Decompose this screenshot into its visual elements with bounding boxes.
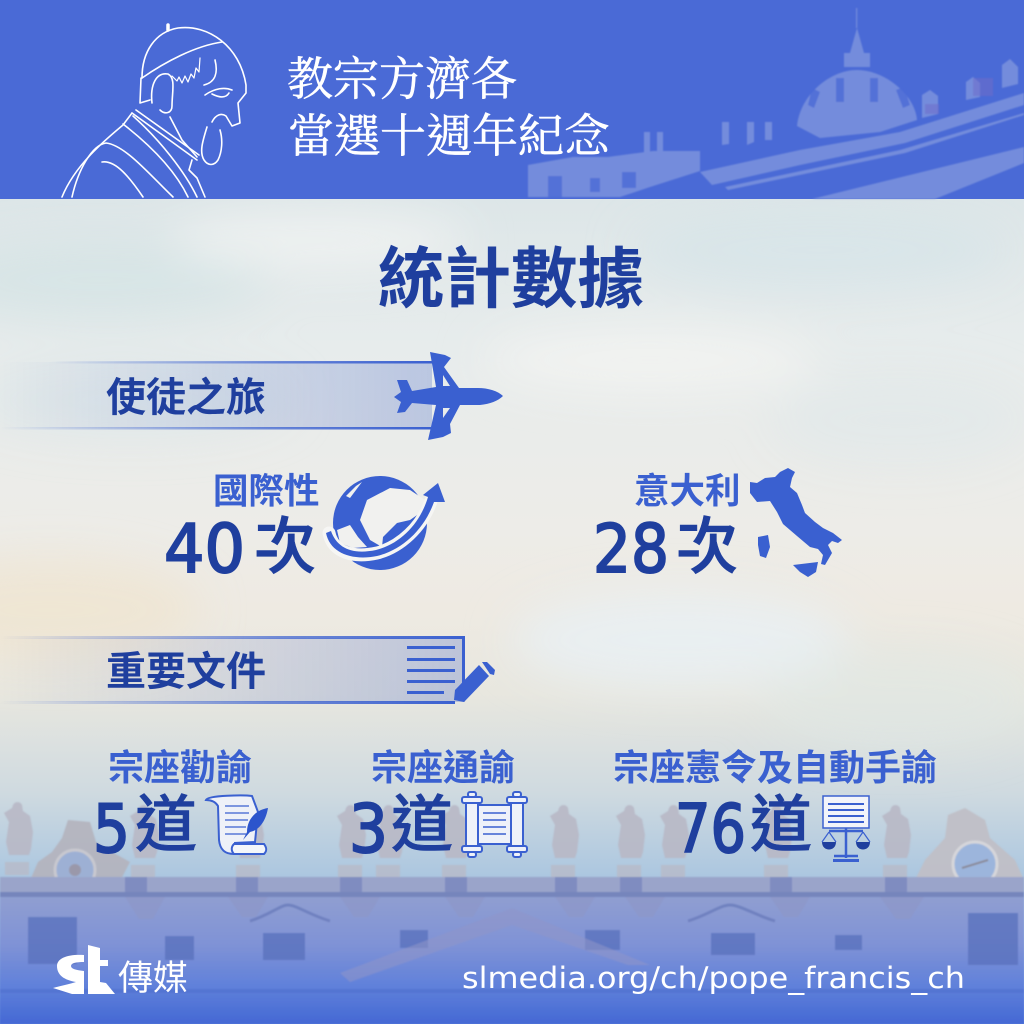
stat: Italy trips: 次	[676, 513, 738, 582]
stat: international trips: 次	[254, 513, 316, 582]
section banner: apostolic journeys	[0, 352, 503, 440]
stat: encyclicals: 宗座通諭	[371, 747, 515, 788]
heading: 統計數據	[378, 243, 644, 317]
section banner: important documents	[0, 636, 495, 704]
stat: international trips: 國際性	[213, 471, 320, 511]
stat: apostolic exhortations: 道	[135, 791, 197, 860]
icon: document lines and pencil	[407, 646, 495, 702]
icon: map of Italy	[750, 468, 842, 577]
stat: apostolic exhortations	[93, 747, 268, 868]
section banner: important documents: 重要文件	[106, 650, 266, 694]
icon: scroll with quill	[206, 795, 268, 854]
logo: SL media: 傳媒	[118, 959, 188, 998]
stat: apostolic exhortations: 5	[93, 790, 130, 868]
title: 當選十週年紀念	[288, 111, 610, 162]
icon: pope line portrait	[62, 25, 246, 197]
stat: constitutions and motu proprio: 76	[675, 790, 746, 868]
header band	[0, 0, 1024, 199]
website url: slmedia.org/ch/pope_francis_ch	[462, 961, 965, 995]
icon: law document with scales	[822, 796, 870, 862]
icon: globe with arrow	[326, 476, 445, 570]
stat: apostolic exhortations: 宗座勸諭	[108, 747, 252, 788]
stat: encyclicals: 3	[349, 790, 388, 868]
stat: constitutions and motu proprio: 道	[750, 791, 812, 860]
title: 教宗方濟各	[287, 54, 517, 105]
stat: encyclicals: 道	[391, 791, 453, 860]
logo: SL media	[53, 945, 188, 998]
stat: encyclicals	[349, 747, 527, 868]
background photo: colonnade facade with statues	[0, 802, 1024, 1024]
stat: constitutions and motu proprio: 宗座憲令及自動手諭	[613, 747, 937, 788]
title	[287, 54, 610, 162]
stat: Italy trips: 28	[593, 510, 669, 588]
icon: airplane	[394, 352, 503, 440]
stat: Italy trips: 意大利	[634, 471, 741, 511]
stat: international trips	[164, 471, 445, 588]
stat: constitutions and motu proprio	[613, 747, 937, 868]
photo: St Peter's dome and colonnade	[528, 8, 1024, 199]
stat: Italy trips	[593, 468, 842, 588]
stat: international trips: 40	[164, 510, 245, 588]
icon: open scroll	[462, 792, 527, 857]
section banner: apostolic journeys: 使徒之旅	[106, 376, 266, 420]
